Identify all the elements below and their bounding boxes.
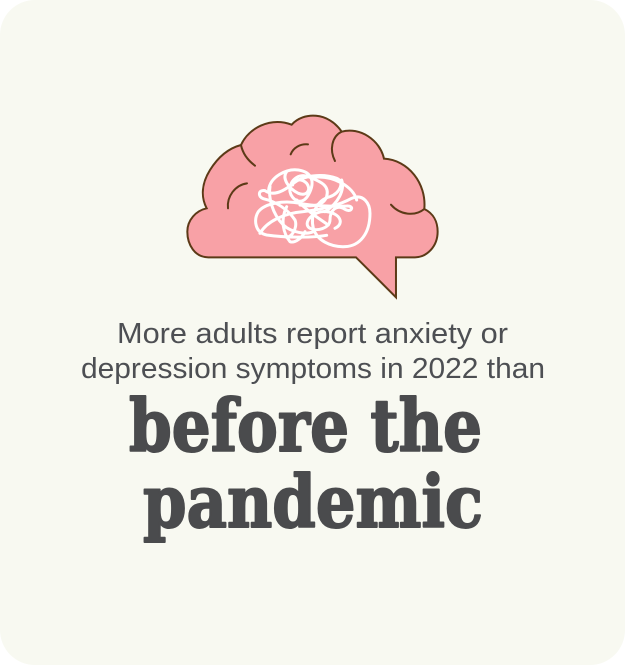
brain fold lines	[228, 132, 424, 214]
heading	[129, 383, 483, 544]
text: subheading	[81, 318, 545, 385]
heading line 2: pandemic	[143, 459, 483, 544]
subheading line 1: More adults report anxiety or	[117, 318, 508, 350]
heading line 1: before the	[129, 383, 482, 468]
icon: brain speech bubble	[187, 116, 438, 297]
white scribble	[256, 170, 370, 247]
subheading line 2: depression symptoms in 2022 than	[81, 353, 545, 385]
brain outline	[187, 116, 438, 297]
